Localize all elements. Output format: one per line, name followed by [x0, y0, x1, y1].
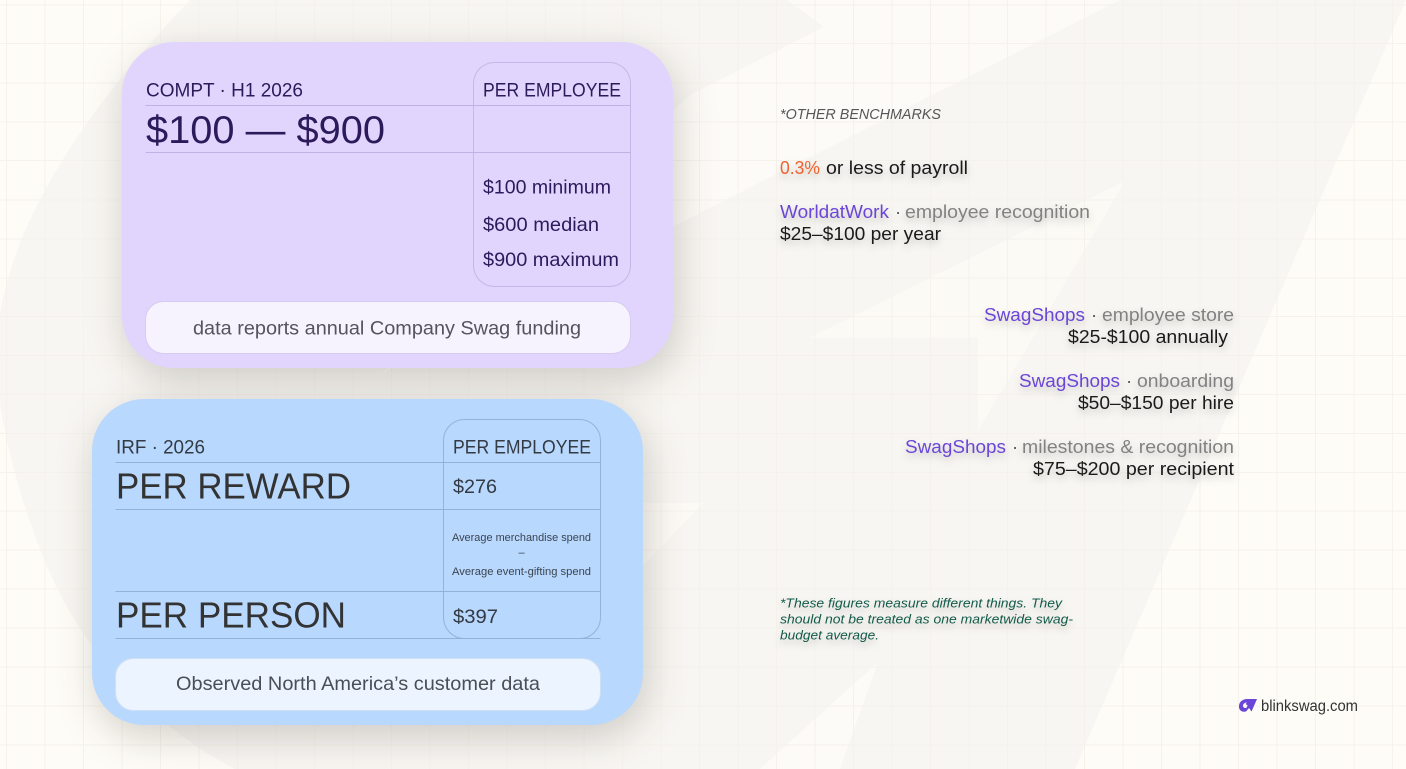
value: per reward: $276 — [453, 476, 497, 498]
benchmark: SwagShops onboarding: · — [1126, 370, 1132, 391]
benchmark: SwagShops milestones: milestones & recognition — [1022, 436, 1234, 457]
comparison explanation — [452, 532, 591, 578]
comparison explanation: Average merchandise spend — [452, 532, 591, 544]
brand url: blinkswag.com — [1261, 698, 1358, 715]
footnote: *These figures measure different things. They — [780, 596, 1064, 610]
note pill: IRF — [116, 658, 600, 710]
benchmark: SwagShops employee store: employee store — [1102, 304, 1234, 325]
benchmark: SwagShops employee store: $25-$100 annually — [1068, 326, 1229, 347]
note pill: Compt: data reports annual Company Swag funding — [193, 318, 581, 340]
benchmark: SwagShops onboarding: $50–$150 per hire — [1078, 392, 1234, 413]
benchmark: SwagShops milestones: SwagShops — [905, 436, 1006, 457]
comparison explanation: – — [518, 547, 525, 559]
benchmark: WorldatWork: WorldatWork — [780, 201, 890, 222]
footnote: budget average. — [780, 628, 879, 642]
brand logo — [1239, 698, 1358, 715]
heading: per reward: PER REWARD — [116, 466, 351, 506]
benchmark: WorldatWork: · — [895, 201, 901, 222]
benchmark: SwagShops onboarding — [1019, 370, 1234, 413]
value: per person: $397 — [453, 606, 498, 628]
benchmark: SwagShops employee store: SwagShops — [984, 304, 1085, 325]
heading: per person: PER PERSON — [116, 594, 346, 636]
footnote: should not be treated as one marketwide swag- — [780, 612, 1074, 626]
benchmark: WorldatWork — [780, 201, 1090, 244]
benchmark: WorldatWork: employee recognition — [905, 201, 1090, 222]
benchmark: SwagShops milestones — [905, 436, 1234, 479]
footnote — [780, 596, 1074, 642]
benchmark: share of payroll: or less of payroll — [826, 157, 968, 178]
source label: IRF: IRF · 2026 — [116, 438, 205, 458]
panel: IRF per-reward and per-person card — [92, 399, 643, 725]
benchmark: SwagShops onboarding: SwagShops — [1019, 370, 1120, 391]
benchmark: share of payroll: 0.3% — [780, 157, 820, 178]
source label: Compt: COMPT · H1 2026 — [146, 80, 303, 102]
panel: Compt per-employee funding card — [122, 42, 673, 368]
benchmark: SwagShops onboarding: onboarding — [1137, 370, 1234, 391]
note pill: Compt — [146, 302, 630, 354]
maximum value: $900 maximum — [483, 249, 619, 271]
minimum value: $100 minimum — [483, 176, 611, 198]
per employee column outline — [444, 420, 600, 638]
benchmark: SwagShops employee store: · — [1091, 304, 1097, 325]
benchmark: SwagShops employee store — [984, 304, 1234, 347]
column heading: per employee: PER EMPLOYEE — [483, 80, 621, 102]
note pill: IRF: Observed North America’s customer data — [176, 673, 540, 695]
median value: $600 median — [483, 214, 599, 236]
headline range: $100 — $900 — [146, 109, 385, 152]
benchmark: SwagShops milestones: $75–$200 per recipient — [1033, 458, 1234, 479]
column heading: per employee: PER EMPLOYEE — [453, 438, 591, 458]
benchmark: SwagShops milestones: · — [1012, 436, 1018, 457]
comparison explanation: Average event-gifting spend — [452, 566, 591, 578]
benchmark: WorldatWork: $25–$100 per year — [780, 223, 941, 244]
per employee column outline — [474, 62, 630, 286]
icon: blinkswag mark — [1239, 699, 1257, 712]
heading: other benchmarks: *OTHER BENCHMARKS — [780, 106, 941, 123]
